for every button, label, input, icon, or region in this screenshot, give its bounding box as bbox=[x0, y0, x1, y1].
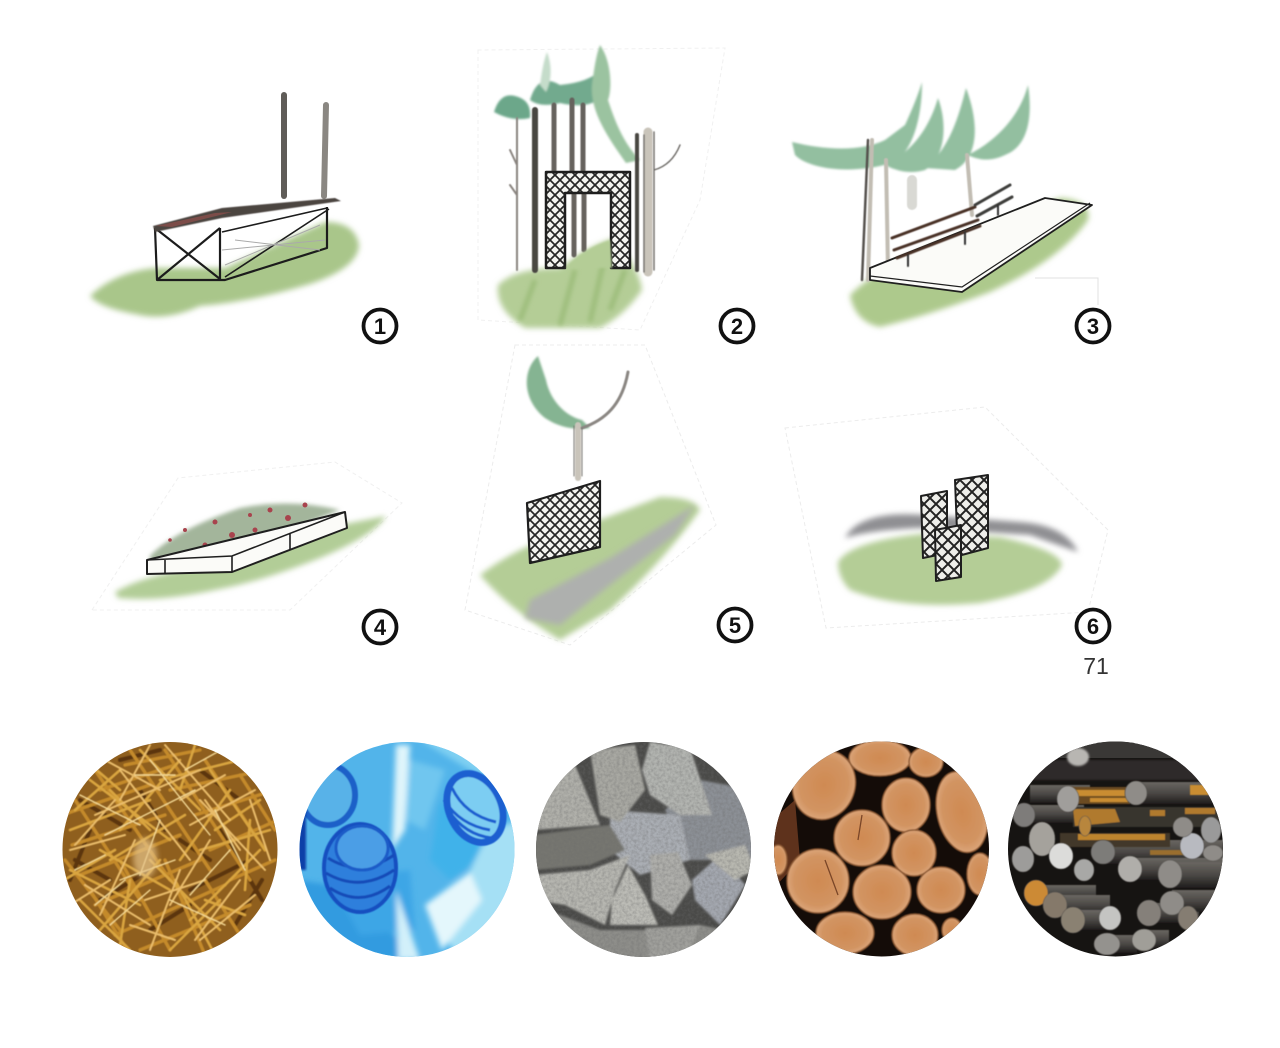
number 2 badge: 2 bbox=[731, 314, 743, 339]
grass patch bbox=[480, 497, 700, 640]
grass strokes bbox=[520, 255, 625, 325]
lattice arch bbox=[546, 172, 630, 268]
number 6 badge: 6 bbox=[1087, 614, 1099, 639]
number 6 badge bbox=[1076, 610, 1110, 642]
platform bbox=[870, 198, 1092, 292]
grass patch bbox=[850, 198, 1088, 327]
foliage sweeps bbox=[792, 82, 1030, 172]
material: steel rods bbox=[1006, 740, 1230, 960]
number 3 badge bbox=[1076, 310, 1110, 342]
page number: 71 bbox=[1083, 653, 1109, 679]
grass patch bbox=[498, 238, 642, 328]
rod ends bbox=[1012, 781, 1223, 955]
material: timber logs bbox=[769, 740, 995, 960]
number 5 badge: 5 bbox=[729, 613, 741, 638]
planting bbox=[150, 503, 340, 562]
dashed site outline bbox=[478, 48, 725, 330]
braced frame bbox=[155, 207, 329, 280]
material: concrete rubble bbox=[534, 740, 755, 965]
number 4 badge: 4 bbox=[374, 615, 387, 640]
tree trunks bbox=[284, 95, 326, 196]
lattice columns bbox=[921, 475, 988, 581]
number 1 badge: 1 bbox=[374, 314, 386, 339]
bench top bbox=[153, 198, 341, 232]
sketch 5: lattice panel under tree beside path bbox=[465, 345, 716, 645]
rusty rods bbox=[1060, 785, 1223, 855]
material: plastic bottles bbox=[298, 740, 520, 960]
ground stroke bbox=[1035, 278, 1098, 305]
grass patch bbox=[90, 222, 359, 317]
foliage bbox=[494, 45, 640, 163]
foliage bbox=[527, 356, 590, 429]
path surface bbox=[525, 505, 695, 625]
grass patch bbox=[115, 516, 386, 599]
dashed site outline bbox=[785, 407, 1108, 628]
grey wash bbox=[845, 514, 1078, 552]
sketch 3: benches on platform under trees bbox=[792, 82, 1098, 327]
flowers bbox=[168, 502, 308, 548]
bottle necks bbox=[301, 764, 514, 912]
planter frame bbox=[147, 512, 347, 574]
number 4 badge bbox=[364, 610, 396, 644]
grass in front of arch bbox=[566, 240, 612, 268]
lattice panel bbox=[527, 481, 600, 563]
sketch 6: three lattice columns bbox=[785, 407, 1108, 628]
tree trunk and branches bbox=[574, 372, 628, 478]
material: straw bbox=[60, 740, 280, 960]
number 5 badge bbox=[718, 608, 752, 642]
rods bbox=[1024, 782, 1230, 953]
sketch 2: lattice arch among trees bbox=[478, 45, 725, 330]
sketch 1: bench with X-braced frame bbox=[90, 95, 359, 317]
grass patch bbox=[838, 534, 1062, 605]
sketch 4: planter bed with flowers bbox=[92, 462, 402, 610]
trunks bbox=[862, 140, 972, 280]
dashed site outline bbox=[465, 345, 716, 645]
number 2 badge bbox=[720, 310, 754, 342]
trunks bbox=[510, 100, 680, 272]
benches bbox=[892, 185, 1012, 266]
number 1 badge bbox=[364, 310, 396, 342]
dashed site outline bbox=[92, 462, 402, 610]
number 3 badge: 3 bbox=[1087, 314, 1099, 339]
